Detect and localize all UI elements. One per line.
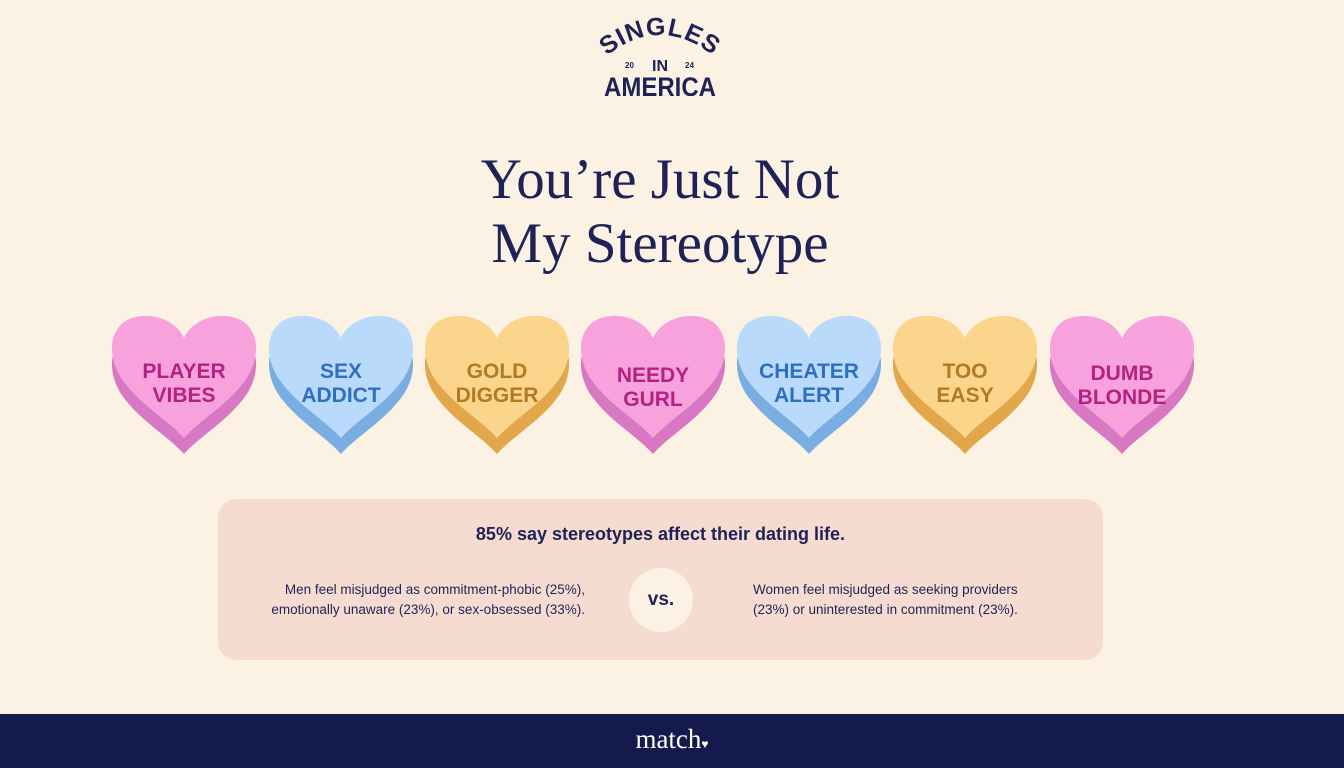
heart: sex addict: ADDICT — [301, 384, 381, 407]
heart: cheater alert: ALERT — [774, 384, 844, 407]
heart: gold digger: GOLD — [467, 360, 527, 383]
footer — [0, 714, 1344, 768]
heart: too easy: TOO — [942, 360, 988, 383]
heart: player vibes — [112, 316, 256, 454]
title — [481, 148, 839, 275]
title: My Stereotype — [491, 212, 829, 275]
logo: singles in america — [600, 18, 720, 96]
vs circle: vs. — [648, 589, 674, 610]
men text: emotionally unaware (23%), or sex-obsessed (33%). — [271, 602, 585, 617]
men text: Men feel misjudged as commitment-phobic (25%), — [285, 582, 585, 597]
heart: too easy — [893, 316, 1037, 454]
headline stat: 85% say stereotypes affect their dating life. — [476, 524, 845, 544]
women text: (23%) or uninterested in commitment (23%). — [753, 602, 1018, 617]
logo: singles in america: IN — [652, 58, 668, 75]
heart: cheater alert: CHEATER — [759, 360, 859, 383]
heart: dumb blonde — [1050, 316, 1194, 454]
vs circle — [629, 568, 693, 632]
heart: too easy: EASY — [936, 384, 994, 407]
logo: singles in america: 20 — [625, 61, 634, 70]
heart: sex addict — [269, 316, 413, 454]
heart: needy gurl: GURL — [623, 388, 683, 411]
heart: player vibes: VIBES — [152, 384, 216, 407]
women text: Women feel misjudged as seeking providers — [753, 582, 1018, 597]
hearts row — [112, 316, 1194, 454]
heart: needy gurl — [581, 316, 725, 454]
heart: needy gurl: NEEDY — [617, 364, 689, 387]
heart: cheater alert — [737, 316, 881, 454]
heart: gold digger — [425, 316, 569, 454]
match logo: match♥ — [635, 724, 709, 754]
logo: singles in america: 24 — [685, 61, 694, 70]
men text — [271, 582, 585, 617]
title: You’re Just Not — [481, 148, 839, 211]
heart: dumb blonde: BLONDE — [1078, 386, 1166, 409]
panel: stats — [218, 499, 1103, 660]
heart: gold digger: DIGGER — [456, 384, 538, 407]
women text — [753, 582, 1018, 617]
heart: dumb blonde: DUMB — [1090, 362, 1154, 385]
logo: singles in america: SINGLES — [600, 18, 720, 54]
heart: player vibes: PLAYER — [142, 360, 226, 383]
heart: sex addict: SEX — [320, 360, 362, 383]
